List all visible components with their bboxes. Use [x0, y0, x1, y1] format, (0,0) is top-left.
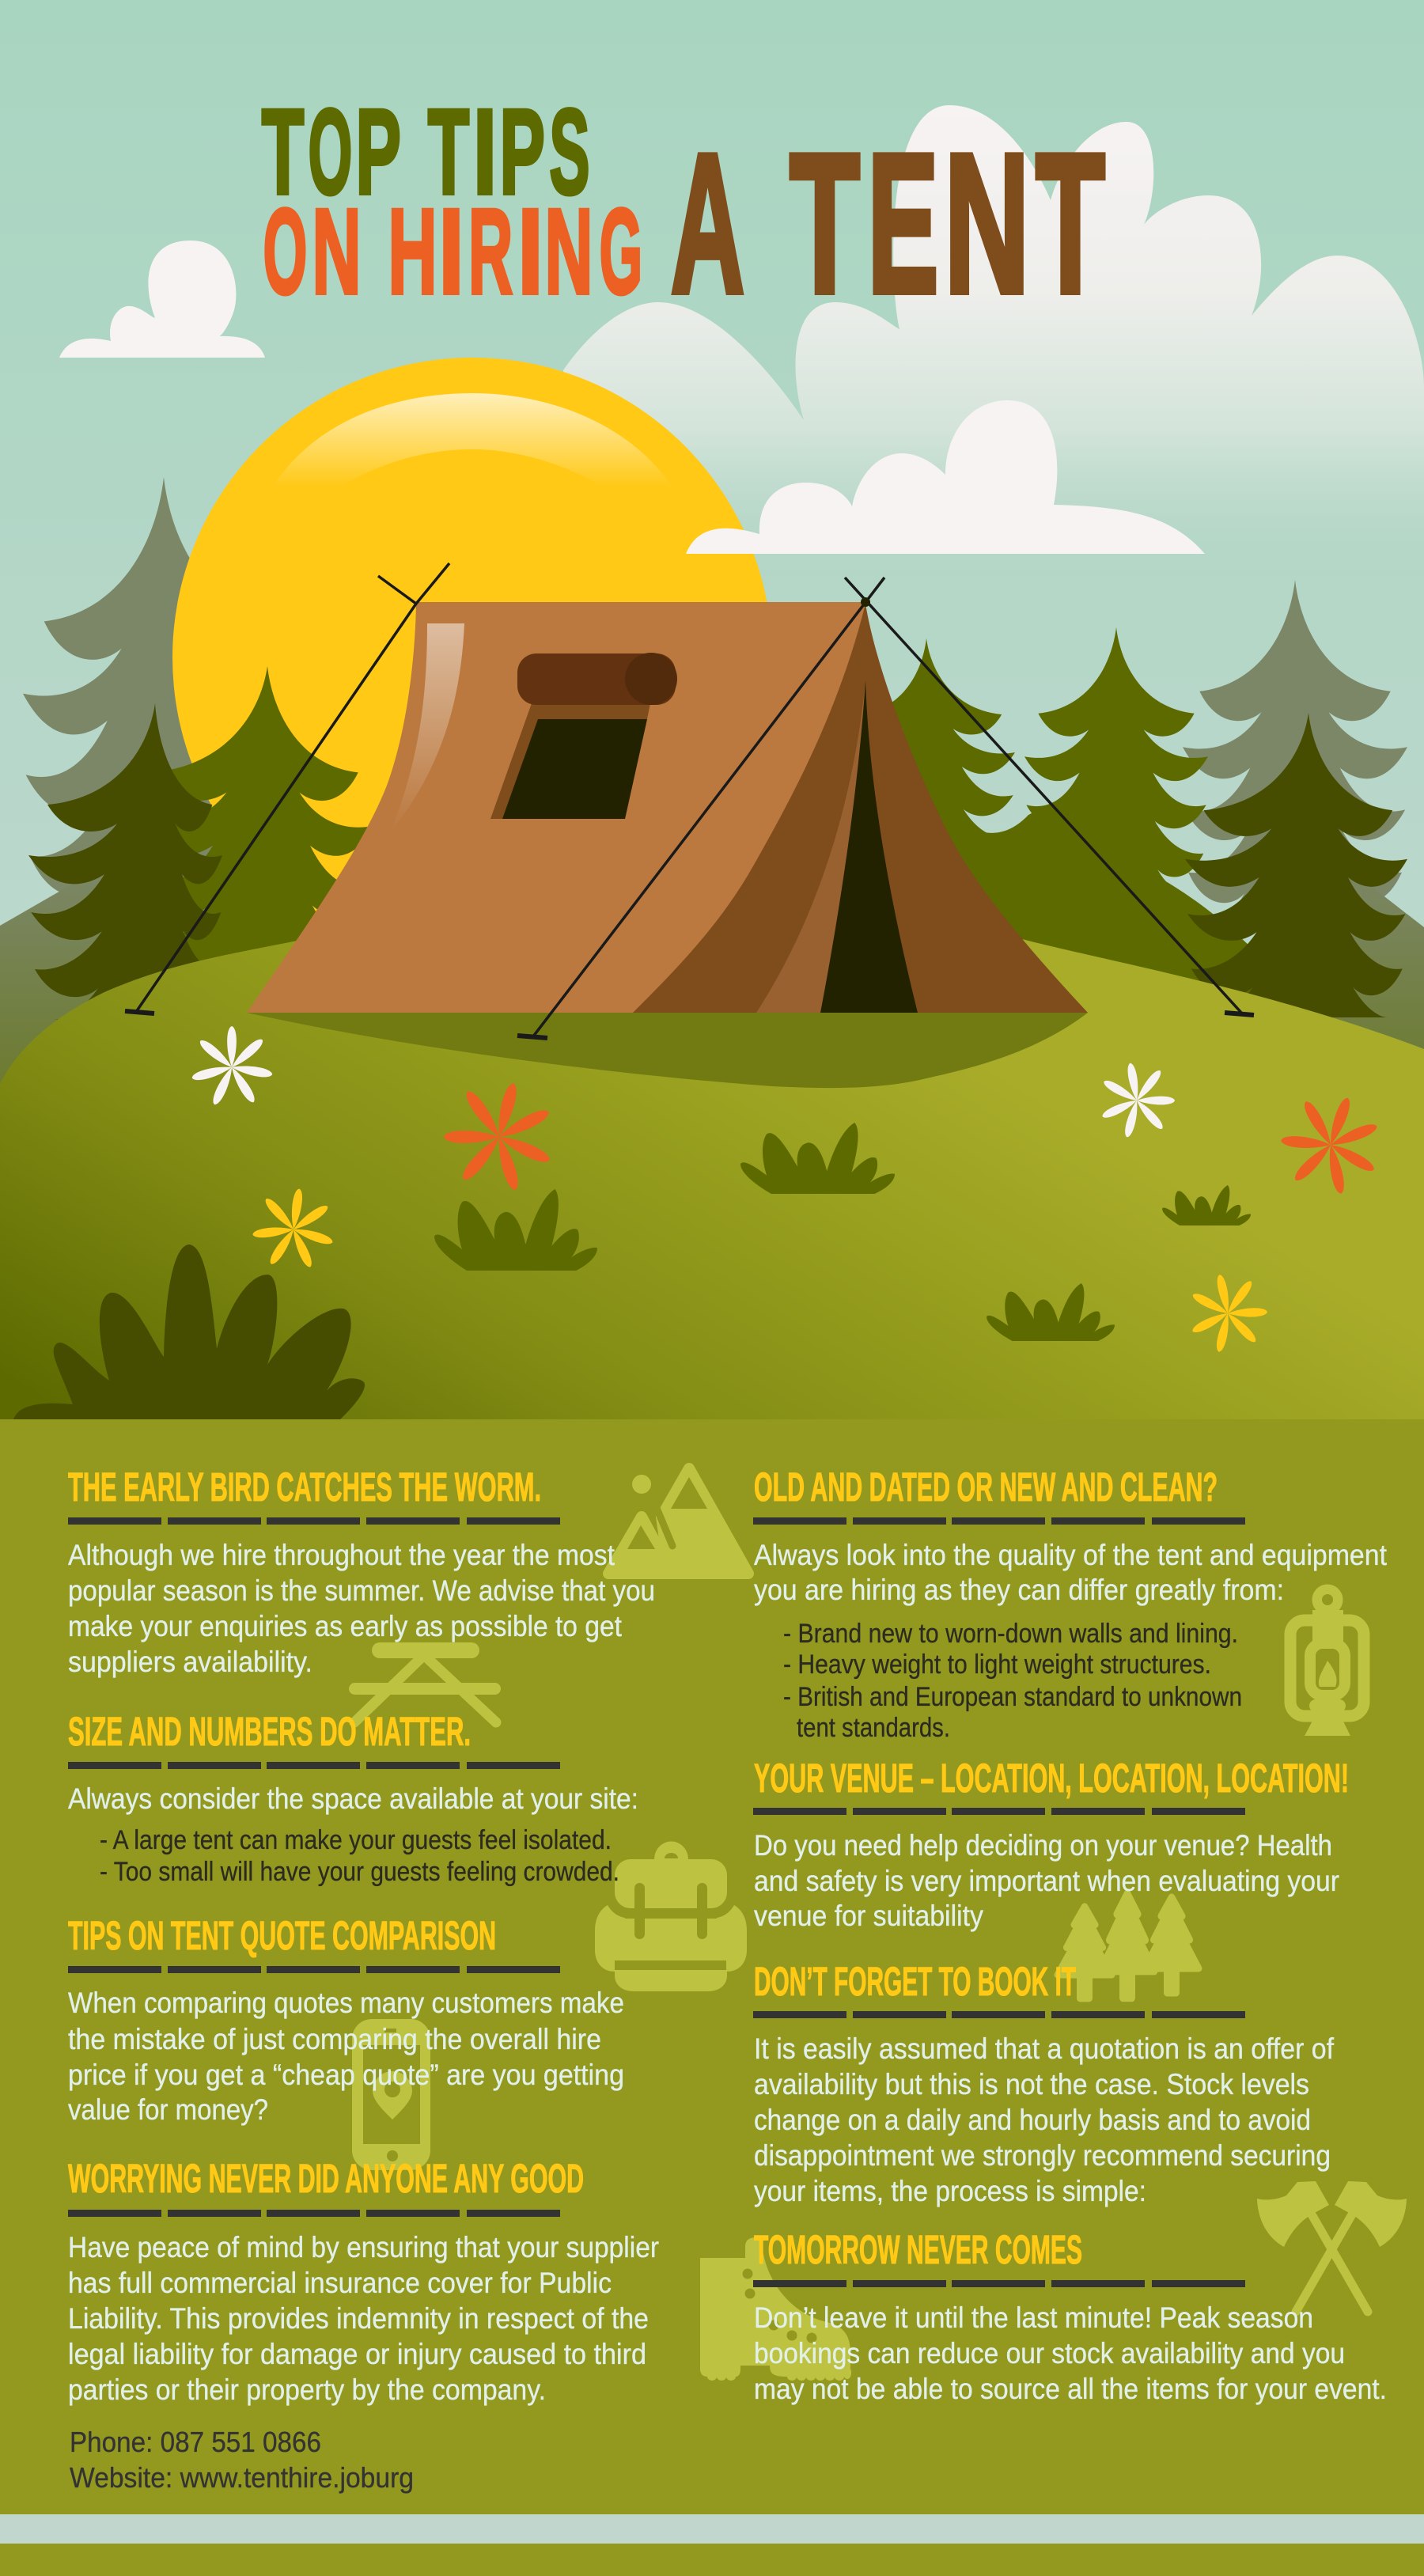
body text: availability but this is not the case. Stock levels [754, 2068, 1309, 2101]
section: quote comparison [68, 1913, 624, 2126]
icon: three pine trees [1058, 1893, 1199, 1998]
body text [754, 1539, 1388, 1606]
icon: boots [700, 2237, 851, 2381]
title line: top tips: O [309, 84, 352, 220]
section: worrying [68, 2156, 659, 2406]
section: tomorrow never comes [753, 2227, 1387, 2405]
orange flower centre [432, 1069, 567, 1203]
body text: value for money? [68, 2093, 268, 2126]
bullet list: - Heavy weight to light weight structures. [783, 1650, 1211, 1680]
tent wall highlight [391, 623, 464, 832]
heading: WORRYING NEVER DID ANYONE ANY GOOD [68, 2156, 584, 2201]
title line: a tent: T [1036, 113, 1105, 335]
icon: mountains [608, 1468, 748, 1574]
body text: It is easily assumed that a quotation is an offer of [754, 2032, 1335, 2065]
tent side shade [633, 604, 1088, 1013]
tent door flap [756, 681, 865, 1013]
title line: a tent: N [945, 113, 1030, 335]
orange flower right [1268, 1081, 1395, 1207]
large dark bush [13, 1244, 365, 1419]
title line: a tent: T [790, 113, 860, 335]
title line: on hiring: N [312, 184, 361, 320]
dashed divider [753, 1517, 1245, 1525]
title line: on hiring: R [468, 184, 513, 320]
grass tuft centre [740, 1123, 895, 1194]
title line: top tips: P [356, 84, 401, 220]
body text: Have peace of mind by ensuring that your supplier [68, 2231, 659, 2263]
dashed divider [68, 1517, 560, 1525]
title [262, 84, 1105, 335]
body text: disappointment we strongly recommend securing [754, 2139, 1331, 2172]
icon: picnic table [349, 1642, 501, 1722]
heading: THE EARLY BIRD CATCHES THE WORM. [68, 1464, 541, 1510]
bullet list: - A large tent can make your guests feel isolated. [100, 1825, 612, 1855]
tent door opening [820, 680, 918, 1013]
grey fir tree, back right [1183, 580, 1407, 928]
bullet list: - British and European standard to unknown [783, 1682, 1242, 1712]
heading: DON’T FORGET TO BOOK IT [754, 1959, 1076, 2004]
body text: make your enquiries as early as possible to get [68, 1610, 623, 1642]
body text: bookings can reduce our stock availability and you [754, 2337, 1345, 2370]
bullet list: tent standards. [797, 1713, 950, 1743]
yellow flower right [1181, 1267, 1274, 1358]
sun [172, 358, 772, 957]
green fir tree, left [131, 666, 374, 998]
body text [754, 2301, 1387, 2405]
info panel background [0, 1419, 1424, 2576]
body text: price if you get a “cheap quote” are you getting [68, 2059, 624, 2091]
window flap [490, 703, 650, 819]
dashed divider [753, 1808, 1245, 1815]
title line: top tips: T [428, 84, 469, 220]
body text: change on a daily and hourly basis and to avoid [754, 2104, 1311, 2136]
dark fir tree, left [28, 703, 222, 1020]
small cloud left [59, 241, 265, 358]
body text: When comparing quotes many customers make [68, 1987, 624, 2019]
grass tuft left [434, 1189, 597, 1271]
bullet list: - Too small will have your guests feeling crowded. [100, 1857, 619, 1887]
distant grey hills [0, 858, 1424, 1108]
green fir tree behind tent [847, 638, 1015, 876]
grass tuft right small [1162, 1185, 1251, 1225]
section: size and numbers [68, 1709, 638, 1887]
body text [754, 1829, 1339, 1932]
title line: top tips: S [549, 84, 590, 220]
body text: parties or their property by the company. [68, 2373, 546, 2406]
title line: on hiring [263, 184, 642, 320]
tent shadow [247, 1013, 1088, 1088]
body text: popular season is the summer. We advise that you [68, 1574, 655, 1607]
icon: lantern [1290, 1584, 1364, 1736]
body text [754, 2032, 1335, 2207]
body text: suppliers availability. [68, 1646, 312, 1678]
bullet list [783, 1619, 1242, 1743]
body text: Do you need help deciding on your venue? Health [754, 1829, 1332, 1862]
dashed divider [753, 2011, 1245, 2018]
contact details [70, 2426, 414, 2494]
grass tuft lower right [987, 1283, 1115, 1341]
contact details: Website: www.tenthire.joburg [70, 2461, 414, 2494]
grey fir tree, back left [23, 477, 305, 928]
heading: TIPS ON TENT QUOTE COMPARISON [68, 1913, 496, 1958]
title line: top tips: I [473, 84, 497, 220]
section: don't forget to book [753, 1959, 1335, 2207]
title line: on hiring: N [545, 184, 593, 320]
body text: Don’t leave it until the last minute! Peak season [754, 2301, 1313, 2334]
tent [247, 602, 1088, 1013]
rolled window cover [517, 653, 677, 705]
large background cloud [563, 105, 1424, 633]
icon: backpack [595, 1841, 747, 1991]
title line: a tent: E [868, 113, 938, 335]
grassy hill [0, 939, 1424, 1419]
title line: top tips: T [262, 84, 304, 220]
sun highlight [272, 393, 672, 487]
body text: the mistake of just comparing the overall hire [68, 2023, 601, 2055]
bullet list: - Brand new to worn-down walls and lining. [783, 1619, 1238, 1649]
tent main wall [247, 602, 870, 1013]
large white cloud [686, 400, 1205, 554]
title line: on hiring: I [517, 184, 543, 320]
section: the early bird [68, 1464, 655, 1678]
footer strip [0, 2514, 1424, 2544]
tent poles and guy ropes [125, 563, 1254, 1038]
body text: legal liability for damage or injury caused to third [68, 2338, 646, 2370]
dark fir tree, right [1185, 713, 1407, 1017]
body text [68, 2231, 659, 2406]
section: your venue [753, 1756, 1349, 1932]
dashed divider [753, 2280, 1245, 2287]
white flower right [1093, 1056, 1180, 1142]
white flower left [191, 1026, 273, 1107]
heading: TOMORROW NEVER COMES [754, 2227, 1082, 2272]
body text: you are hiring as they can differ greatly from: [754, 1574, 1284, 1606]
title line: top tips: P [500, 84, 545, 220]
title line: on hiring: I [438, 184, 464, 320]
icon: phone with map pin [352, 2019, 430, 2170]
window [502, 719, 647, 819]
body text: Always consider the space available at your site: [68, 1782, 638, 1815]
icon: crossed axes [1257, 2181, 1407, 2312]
body text: Although we hire throughout the year the most [68, 1539, 615, 1571]
title line: a tent: A [671, 113, 744, 335]
body text: your items, the process is simple: [754, 2175, 1146, 2207]
sky background [0, 0, 1424, 1424]
title line: on hiring: H [388, 184, 437, 320]
green slope behind tent [870, 791, 1309, 1044]
title line: on hiring: O [263, 184, 307, 320]
section: old and dated [753, 1464, 1388, 1743]
body text: and safety is very important when evaluating your [754, 1865, 1339, 1897]
title line: a tent [671, 113, 1105, 335]
body text: Liability. This provides indemnity in respect of the [68, 2302, 649, 2335]
title: G [600, 184, 642, 320]
yellow flower left [248, 1183, 340, 1274]
body text: has full commercial insurance cover for Public [68, 2267, 612, 2299]
body text [68, 1539, 655, 1678]
dashed divider [68, 1966, 560, 1973]
body text [68, 1987, 624, 2126]
dashed divider [68, 1762, 560, 1769]
green fir tree, right [1024, 627, 1208, 896]
body text: venue for suitability [754, 1900, 983, 1932]
heading: SIZE AND NUMBERS DO MATTER. [68, 1709, 471, 1754]
dashed divider [68, 2210, 560, 2217]
contact details: Phone: 087 551 0866 [70, 2426, 321, 2458]
title line: top tips [262, 84, 590, 220]
bullet list [100, 1825, 619, 1887]
